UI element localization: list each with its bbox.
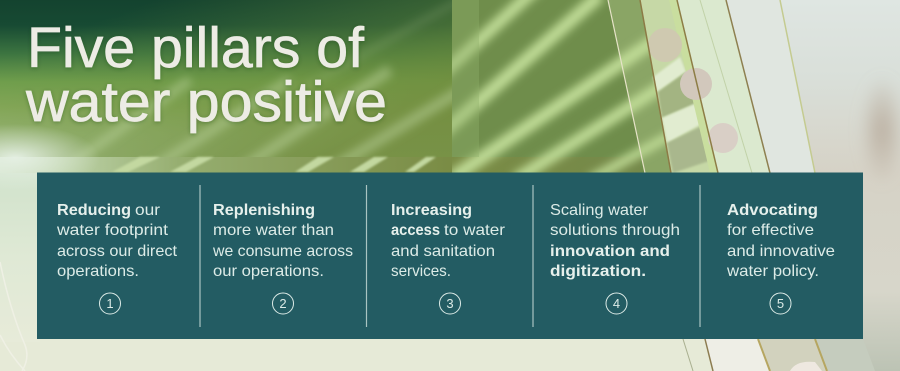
- pillar 4: scaling solutions: 4: [613, 296, 620, 311]
- pillar 5: advocating: 5: [777, 296, 784, 311]
- pillar 2: replenishing: Replenishing: [213, 202, 315, 219]
- leaf strips: [608, 0, 815, 173]
- pillar 1: reducing: across our direct: [57, 243, 178, 260]
- pillar 4: scaling solutions: solutions through: [550, 222, 680, 239]
- bottom-left leaf curves: [0, 262, 27, 371]
- pillar 3: increasing access: access: [391, 222, 440, 239]
- pillar 1: reducing: operations.: [57, 263, 139, 280]
- bottom-right stems: [683, 339, 875, 371]
- pillar 5: advocating: Advocating: [727, 202, 818, 219]
- panel: five pillars: [37, 172, 863, 339]
- pillar 1: reducing: 1: [106, 296, 114, 311]
- pillar 2: replenishing: our operations.: [213, 263, 324, 280]
- pillar 4: scaling solutions: Scaling water: [550, 202, 649, 219]
- pillar 1: reducing: [56, 202, 178, 314]
- pillar 5: advocating: for effective: [727, 222, 814, 239]
- pillar 1: reducing: our: [135, 202, 161, 219]
- pillar 4: scaling solutions: [550, 202, 680, 314]
- pillar 2: replenishing: 2: [279, 296, 287, 311]
- pillar 1: reducing: water footprint: [56, 222, 169, 239]
- pillar 3: increasing access: 3: [446, 296, 454, 311]
- pillar 3: increasing access: to water: [444, 222, 506, 239]
- pillar 2: replenishing: we consume across: [212, 243, 353, 260]
- pillar 3: increasing access: [391, 202, 506, 314]
- title: [25, 16, 387, 134]
- water droplets: [648, 28, 738, 153]
- pillar 2: replenishing: more water than: [213, 222, 334, 239]
- title: water positive: [25, 70, 387, 134]
- pillar 3: increasing access: Increasing: [391, 202, 472, 219]
- pillar 2: replenishing: [212, 202, 353, 314]
- pillar 5: advocating: [726, 202, 835, 314]
- pillar 3: increasing access: and sanitation: [391, 243, 495, 260]
- pillar 3: increasing access: services.: [391, 263, 451, 280]
- pillar 4: scaling solutions: innovation and: [550, 243, 670, 260]
- pillar 4: scaling solutions: digitization.: [550, 263, 646, 280]
- pillar 1: reducing: Reducing: [57, 202, 131, 219]
- pillar 5: advocating: and innovative: [727, 243, 835, 260]
- title: Five pillars of: [27, 16, 364, 80]
- pillar 5: advocating: water policy.: [726, 263, 819, 280]
